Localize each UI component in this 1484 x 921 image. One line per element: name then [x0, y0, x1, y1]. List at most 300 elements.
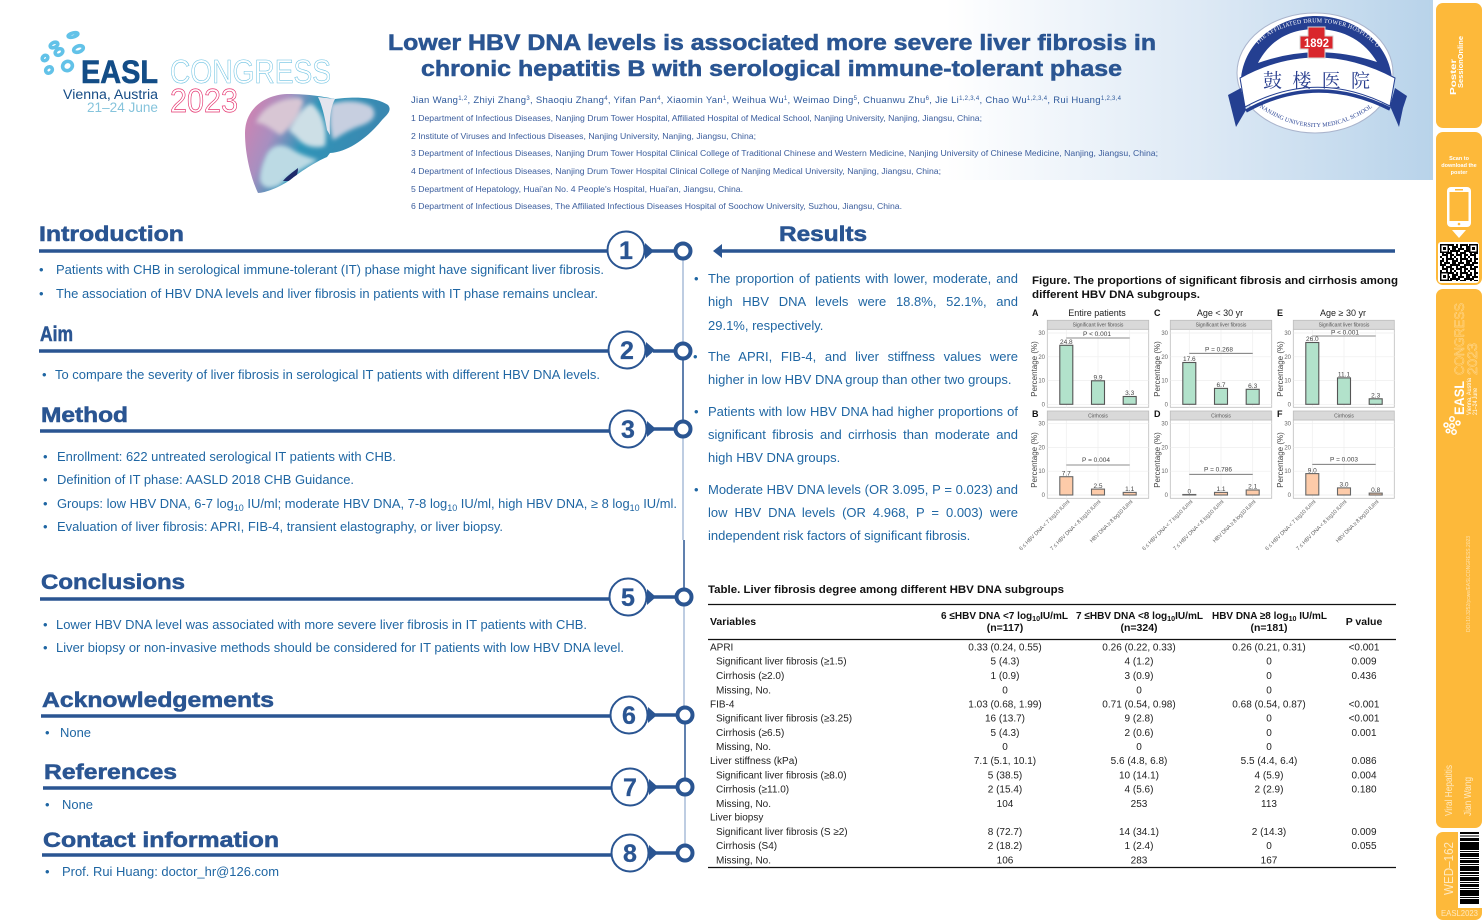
chart F: Age 30 or over, cirrhosis: 0.8: [1371, 487, 1381, 494]
table: liver fibrosis degree: 10 (14.1): [1119, 770, 1159, 782]
sidebar panel: congress details: DOI:10.3252/pcwe/EASLCONGRESS.2023: [1466, 536, 1472, 632]
sidebar panel: congress details: [1436, 289, 1482, 828]
chart C: Age under 30, significant liver fibrosis: 20: [1161, 355, 1169, 361]
chart B: Entire patients, cirrhosis: B: [1032, 409, 1039, 419]
table: liver fibrosis degree: Liver stiffness (kPa): [710, 756, 798, 767]
hospital seal logo: 鼓楼医院: [1263, 66, 1370, 93]
authors: , Shaoqiu Zhang: [530, 95, 604, 106]
chart E: Age 30 or over, significant liver fibrosis: 2.3: [1371, 392, 1381, 400]
chart D: Age under 30, cirrhosis: 0: [1165, 493, 1169, 499]
table header row: (n=117): [987, 622, 1023, 634]
chart F: Age 30 or over, cirrhosis: 10: [1284, 469, 1292, 475]
table: liver fibrosis degree: 5 (4.3): [991, 657, 1019, 668]
results text block: 29.1%, respectively.: [708, 318, 823, 333]
EASL Congress logo: 2023: [170, 82, 238, 119]
authors: 1,2,3,4: [959, 96, 980, 102]
table: liver fibrosis degree: 0.26 (0.21, 0.31): [1232, 642, 1306, 654]
section: Method: IU/ml, high HBV DNA, ≥ 8 log: [457, 496, 630, 511]
section: Method: 3: [621, 416, 635, 444]
hospital seal logo: [1228, 12, 1407, 134]
liver illustration: [245, 94, 390, 193]
table: liver fibrosis degree: 2 (2.9): [1255, 785, 1283, 796]
table: liver fibrosis degree: 5.5 (4.4, 6.4): [1241, 756, 1297, 767]
sidebar panel: congress details: Jian Wang: [1463, 777, 1474, 816]
heading: Aim: Aim: [40, 323, 73, 346]
EASL Congress logo: Vienna, Austria: [63, 87, 159, 102]
chart A: Entire patients, significant liver fibrosis: 3.3: [1125, 390, 1135, 397]
table: liver fibrosis degree: 4 (5.6): [1125, 785, 1153, 796]
chart F: Age 30 or over, cirrhosis: 7 ≤ HBV DNA < 8 log10 IU/ml: [1295, 499, 1348, 552]
heading: References: References: [44, 761, 177, 784]
chart B: Entire patients, cirrhosis: 30: [1038, 422, 1046, 428]
table header row: IU/mL: [1040, 610, 1069, 622]
table: liver fibrosis degree: Significant liver fibrosis (≥8.0): [716, 770, 847, 782]
section: Aim: •: [42, 367, 47, 382]
chart A: Entire patients, significant liver fibrosis: 0: [1042, 402, 1046, 408]
icon: phone: [1447, 187, 1471, 238]
results text block: The APRI, FIB-4, and liver stiffness values were: [708, 349, 1018, 364]
chart C: Age under 30, significant liver fibrosis: 6.7: [1216, 382, 1226, 389]
results text block: The proportion of patients with lower, moderate, and: [708, 271, 1018, 286]
table: liver fibrosis degree: Missing, No.: [716, 856, 771, 866]
chart E: Age 30 or over, significant liver fibrosis: Significant liver fibrosis: [1319, 323, 1370, 329]
section: References: 7: [623, 774, 637, 802]
chart F: Age 30 or over, cirrhosis: 30: [1284, 422, 1292, 428]
section: Method: Enrollment: 622 untreated serological IT patients with CHB.: [57, 449, 396, 464]
authors: , Yifan Pan: [608, 95, 657, 106]
section: Method: •: [43, 496, 48, 511]
icon: white hexagons: [1444, 417, 1460, 434]
chart F: Age 30 or over, cirrhosis: 3.0: [1339, 482, 1349, 489]
heading: Results: [713, 223, 1395, 258]
chart F: Age 30 or over, cirrhosis: F: [1277, 409, 1283, 419]
section: Contact information: Prof. Rui Huang: doctor_hr@126.com: [62, 864, 279, 879]
table: liver fibrosis degree: 0: [1266, 742, 1272, 753]
heading: Acknowledgements: Acknowledgements: [42, 689, 274, 712]
section: Introduction: Patients with CHB in serological immune-tolerant (IT) phase might have significant liver fibrosis.: [56, 262, 604, 277]
table: liver fibrosis degree: Missing, No.: [716, 686, 771, 696]
section: Method: [40, 404, 690, 534]
chart E: Age 30 or over, significant liver fibrosis: 26.0: [1306, 336, 1319, 343]
sidebar panel: congress details: Viral Hepatitis: [1444, 765, 1455, 816]
section: Method: IU/ml.: [640, 496, 677, 511]
chart E: Age 30 or over, significant liver fibrosis: 10: [1284, 378, 1292, 384]
table header row: (n=324): [1120, 622, 1158, 634]
chart D: Age under 30, cirrhosis: 6 ≤ HBV DNA < 7 log10 IU/ml: [1141, 499, 1194, 552]
section: References: None: [62, 797, 93, 812]
authors: , Rui Huang: [1047, 95, 1101, 106]
section: Conclusions: Lower HBV DNA level was associated with more severe liver fibrosis in IT patients with CHB.: [56, 617, 587, 632]
table: liver fibrosis degree: 0.001: [1351, 728, 1377, 739]
table: liver fibrosis degree: 0.26 (0.22, 0.33): [1102, 642, 1176, 654]
section: Method: Evaluation of liver fibrosis: APRI, FIB-4, transient elastography, or liver biopsy.: [57, 519, 503, 534]
table header row: Variables: [710, 616, 756, 628]
hospital seal logo: NANJING UNIVERSITY MEDICAL SCHOOL: [1260, 104, 1372, 127]
table: liver fibrosis degree: FIB-4: [710, 700, 735, 710]
chart C: Age under 30, significant liver fibrosis: 6.3: [1248, 383, 1258, 390]
affiliations: 2 Institute of Viruses and Infectious Diseases, Nanjing University, Nanjing, Jiangsu, China;: [411, 131, 756, 141]
section: Conclusions: [40, 571, 692, 655]
authors: 4: [657, 96, 661, 102]
timeline spine: [683, 258, 685, 853]
authors: 4: [604, 96, 608, 102]
chart D: Age under 30, cirrhosis: [1141, 409, 1272, 552]
section: Contact information: 8: [623, 840, 637, 868]
table: liver fibrosis degree: APRI: [710, 642, 733, 654]
sidebar panel: congress details: Vienna, Austria: [1467, 377, 1473, 415]
chart F: Age 30 or over, cirrhosis: 9.0: [1308, 467, 1317, 474]
table: liver fibrosis degree: 0.009: [1351, 657, 1377, 668]
table: liver fibrosis degree: 167: [1261, 856, 1278, 866]
chart D: Age under 30, cirrhosis: HBV DNA ≥ 8 log10 IU/ml: [1212, 499, 1257, 544]
chart F: Age 30 or over, cirrhosis: 0: [1288, 493, 1292, 499]
chart F: Age 30 or over, cirrhosis: Cirrhosis: [1334, 413, 1354, 419]
authors: 1,2,3,4: [1027, 96, 1048, 102]
EASL Congress logo: [41, 32, 331, 119]
barcode: [1460, 832, 1479, 904]
table: liver fibrosis degree: 104: [997, 799, 1014, 810]
authors: 1: [723, 96, 727, 102]
affiliations: [411, 113, 1158, 211]
sidebar panel: congress details: EASL: [1451, 381, 1467, 415]
QR code: [1438, 242, 1479, 283]
chart D: Age under 30, cirrhosis: 7 ≤ HBV DNA < 8 log10 IU/ml: [1172, 499, 1225, 552]
authors: 6: [926, 96, 930, 102]
table: liver fibrosis degree: 0.086: [1351, 756, 1377, 767]
chart E: Age 30 or over, significant liver fibrosis: E: [1277, 308, 1283, 318]
table: liver fibrosis degree: 8 (72.7): [988, 827, 1022, 838]
chart C: Age under 30, significant liver fibrosis: [1153, 308, 1272, 408]
table: liver fibrosis degree: 4 (1.2): [1125, 657, 1153, 668]
chart C: Age under 30, significant liver fibrosis: Percentage (%): [1153, 341, 1162, 397]
chart A: Entire patients, significant liver fibrosis: 30: [1038, 331, 1046, 337]
table: liver fibrosis degree: 4 (5.9): [1255, 770, 1283, 782]
table: liver fibrosis degree: 2 (0.6): [1125, 728, 1153, 739]
table: liver fibrosis degree: Significant liver fibrosis (≥1.5): [716, 657, 847, 668]
chart A: Entire patients, significant liver fibrosis: A: [1032, 308, 1039, 318]
chart A: Entire patients, significant liver fibrosis: 10: [1038, 378, 1046, 384]
table: liver fibrosis degree: 2 (18.2): [988, 841, 1022, 852]
table: liver fibrosis degree: Cirrhosis (≥11.0): [716, 785, 789, 796]
table header row: 10: [1032, 614, 1040, 623]
chart A: Entire patients, significant liver fibrosis: Significant liver fibrosis: [1073, 323, 1124, 329]
results text block: high HBV DNA groups.: [708, 450, 840, 465]
table: liver fibrosis degree: Significant liver fibrosis (S ≥2): [716, 827, 848, 838]
table: liver fibrosis degree: 0: [1266, 657, 1272, 668]
chart C: Age under 30, significant liver fibrosis: Significant liver fibrosis: [1196, 323, 1247, 329]
section: References: [43, 761, 692, 812]
sidebar panel: scan to download: poster: [1451, 170, 1468, 176]
authors: 5: [854, 96, 858, 102]
figure title: [1032, 275, 1398, 301]
section: Introduction: •: [39, 286, 44, 301]
heading: Conclusions: Conclusions: [41, 571, 185, 594]
table: liver fibrosis degree: 0.68 (0.54, 0.87): [1232, 700, 1306, 710]
table: liver fibrosis degree: 0: [1136, 742, 1142, 753]
table: liver fibrosis degree: 0.180: [1351, 785, 1377, 796]
table: liver fibrosis degree: 0: [1266, 714, 1272, 725]
table: liver fibrosis degree: 9 (2.8): [1125, 714, 1153, 725]
sidebar panel: poster ID and barcode: WED–162: [1441, 842, 1456, 895]
table: liver fibrosis degree: 0.009: [1351, 827, 1377, 838]
hospital seal logo: 1892: [1304, 36, 1329, 50]
table: liver fibrosis degree: 1 (2.4): [1125, 841, 1153, 852]
section: Contact information: [42, 829, 692, 879]
authors: 1,2,3,4: [1101, 96, 1122, 102]
chart E: Age 30 or over, significant liver fibrosis: [1276, 308, 1394, 408]
table: liver fibrosis degree: 106: [997, 856, 1014, 866]
chart E: Age 30 or over, significant liver fibrosis: 11.1: [1338, 372, 1350, 379]
table: liver fibrosis degree: 0.055: [1351, 841, 1377, 852]
section: Method: Definition of IT phase: AASLD 2018 CHB Guidance.: [57, 472, 354, 487]
section: Acknowledgements: None: [60, 725, 91, 740]
table: liver fibrosis degree: 113: [1261, 799, 1277, 810]
chart A: Entire patients, significant liver fibrosis: Entire patients: [1068, 308, 1126, 318]
sidebar panel: poster ID and barcode: EASL2023: [1441, 909, 1479, 918]
section: Method: •: [43, 472, 48, 487]
chart C: Age under 30, significant liver fibrosis: 30: [1161, 331, 1169, 337]
authors: , Xiaomin Yan: [661, 95, 723, 106]
section: Aim: 2: [620, 337, 634, 365]
table: liver fibrosis degree: 0: [1002, 742, 1008, 753]
table header row: IU/mL: [1297, 610, 1328, 622]
results text block: independent risk factors of significant fibrosis.: [708, 528, 970, 543]
table header row: HBV DNA ≥8 log: [1212, 610, 1293, 622]
section: Introduction: •: [39, 262, 44, 277]
authors: 3: [526, 96, 530, 102]
table header row: 10: [1167, 614, 1175, 623]
chart E: Age 30 or over, significant liver fibrosis: 0: [1288, 402, 1292, 408]
results text block: higher in low HBV DNA group than other two groups.: [708, 372, 1012, 387]
sidebar panel: scan to download: Scan to: [1449, 156, 1470, 162]
table: liver fibrosis degree: 0.71 (0.54, 0.98): [1102, 700, 1176, 710]
heading: Introduction: Introduction: [39, 223, 184, 246]
chart E: Age 30 or over, significant liver fibrosis: 20: [1284, 355, 1292, 361]
chart D: Age under 30, cirrhosis: Percentage (%): [1153, 432, 1162, 488]
affiliations: 3 Department of Infectious Diseases, Nanjing Drum Tower Hospital Clinical College of Traditional Chinese and Western Medicine, Nanjing University of Chinese Medicine, Nanjing, Jiangsu, China;: [411, 148, 1158, 158]
results text block: •: [693, 349, 698, 364]
table: liver fibrosis degree: 0: [1266, 686, 1272, 696]
section: Method: IU/ml; moderate HBV DNA, 7-8 log: [244, 496, 447, 511]
table header row: (n=181): [1250, 622, 1288, 634]
results text block: low HBV DNA levels (OR 4.968, P = 0.003) were: [708, 505, 1018, 520]
table: liver fibrosis degree: Cirrhosis (S4): [716, 841, 777, 852]
chart B: Entire patients, cirrhosis: Cirrhosis: [1088, 413, 1108, 419]
table: liver fibrosis degree: 253: [1131, 799, 1148, 810]
chart F: Age 30 or over, cirrhosis: [1264, 409, 1394, 552]
section: References: •: [45, 797, 50, 812]
chart A: Entire patients, significant liver fibrosis: [1030, 308, 1149, 408]
table: liver fibrosis degree: 283: [1131, 856, 1148, 866]
section: Method: Groups: low HBV DNA, 6-7 log: [57, 496, 235, 511]
table: liver fibrosis degree: Cirrhosis (≥6.5): [716, 728, 784, 739]
section: Introduction: [39, 223, 690, 301]
chart A: Entire patients, significant liver fibrosis: 24.8: [1060, 339, 1073, 346]
results text block: significant fibrosis and cirrhosis than moderate and: [708, 427, 1018, 442]
chart C: Age under 30, significant liver fibrosis: P = 0.268: [1205, 346, 1233, 354]
affiliations: 4 Department of Infectious Diseases, Nanjing Drum Tower Hospital Clinical College of Nanjing Medical University, Nanjing, Jiangsu, China;: [411, 166, 941, 176]
table: liver fibrosis degree: 0: [1266, 671, 1272, 682]
table: liver fibrosis degree: 1.03 (0.68, 1.99): [968, 700, 1042, 710]
table header row: [710, 610, 1382, 634]
figure title: Figure. The proportions of significant fibrosis and cirrhosis among: [1032, 275, 1398, 287]
chart E: Age 30 or over, significant liver fibrosis: Percentage (%): [1276, 341, 1285, 397]
authors: 1: [784, 96, 788, 102]
chart B: Entire patients, cirrhosis: 0: [1042, 493, 1046, 499]
chart E: Age 30 or over, significant liver fibrosis: 30: [1284, 331, 1292, 337]
affiliations: 6 Department of Infectious Diseases, The Affiliated Infectious Diseases Hospital of Soochow University, Suzhou, Jiangsu, China.: [411, 201, 902, 211]
chart C: Age under 30, significant liver fibrosis: 10: [1161, 378, 1169, 384]
sidebar panel: poster session online: [1436, 3, 1482, 128]
results text block: Patients with low HBV DNA had higher proportions of: [708, 404, 1018, 419]
chart F: Age 30 or over, cirrhosis: 6 ≤ HBV DNA < 7 log10 IU/ml: [1264, 499, 1317, 552]
table: liver fibrosis degree: 1 (0.9): [991, 671, 1019, 682]
section: Acknowledgements: •: [45, 725, 50, 740]
sidebar panel: poster session online: SessionOnline: [1458, 36, 1465, 88]
chart D: Age under 30, cirrhosis: 20: [1161, 446, 1169, 452]
chart D: Age under 30, cirrhosis: 30: [1161, 422, 1169, 428]
table: liver fibrosis degree: 14 (34.1): [1119, 827, 1159, 838]
authors: , Weihua Wu: [727, 95, 784, 106]
chart F: Age 30 or over, cirrhosis: Percentage (%): [1276, 432, 1285, 488]
authors: , Weimao Ding: [788, 95, 853, 106]
chart E: Age 30 or over, significant liver fibrosis: P < 0.001: [1331, 330, 1359, 336]
chart E: Age 30 or over, significant liver fibrosis: Age ≥ 30 yr: [1320, 308, 1366, 318]
table: liver fibrosis degree: 5 (4.3): [991, 728, 1019, 739]
chart B: Entire patients, cirrhosis: [1018, 409, 1149, 552]
table header row: 10: [1289, 614, 1297, 623]
heading: Contact information: Contact information: [43, 829, 279, 852]
sidebar panel: congress details: CONGRESS: [1451, 303, 1467, 375]
table: liver fibrosis degree: 16 (13.7): [985, 714, 1025, 725]
chart A: Entire patients, significant liver fibrosis: 9.9: [1093, 374, 1103, 382]
results text block: •: [694, 404, 699, 419]
chart F: Age 30 or over, cirrhosis: HBV DNA ≥ 8 log10 IU/ml: [1335, 499, 1380, 544]
section: Conclusions: 5: [621, 584, 635, 612]
chart D: Age under 30, cirrhosis: 1.1: [1216, 486, 1226, 493]
EASL Congress logo: CONGRESS: [170, 53, 331, 90]
section: Introduction: 1: [619, 237, 633, 265]
table header row: 7 ≤HBV DNA <8 log: [1076, 610, 1172, 622]
table title: Table. Liver fibrosis degree among different HBV DNA subgroups: [708, 584, 1064, 596]
table: liver fibrosis degree: 0: [1002, 686, 1008, 696]
chart B: Entire patients, cirrhosis: Percentage (%): [1030, 432, 1039, 488]
table header row: IU/mL: [1175, 610, 1204, 622]
section: Method: •: [43, 449, 48, 464]
table: liver fibrosis degree: Liver biopsy: [710, 812, 763, 824]
table header row: P value: [1346, 616, 1382, 628]
table: liver fibrosis degree: 0: [1266, 728, 1272, 739]
chart B: Entire patients, cirrhosis: 10: [1038, 469, 1046, 475]
chart B: Entire patients, cirrhosis: HBV DNA ≥ 8 log10 IU/ml: [1089, 499, 1134, 544]
chart B: Entire patients, cirrhosis: P = 0.004: [1082, 457, 1110, 464]
section: Aim: To compare the severity of liver fibrosis in serological IT patients with different HBV DNA levels.: [55, 367, 600, 382]
section: Method: 10: [447, 503, 457, 513]
section: Aim: [39, 323, 690, 382]
results text block: high HBV DNA levels were 18.8%, 52.1%, and: [708, 294, 1018, 309]
table: liver fibrosis degree: Cirrhosis (≥2.0): [716, 671, 784, 682]
chart B: Entire patients, cirrhosis: 7 ≤ HBV DNA < 8 log10 IU/ml: [1049, 499, 1102, 552]
section: Acknowledgements: 6: [622, 702, 636, 730]
authors: , Chuanwu Zhu: [857, 95, 925, 106]
affiliations: 5 Department of Hepatology, Huai'an No. 4 People's Hospital, Huai'an, Jiangsu, China.: [411, 184, 743, 194]
chart D: Age under 30, cirrhosis: 2.1: [1248, 484, 1258, 491]
table: liver fibrosis degree: Missing, No.: [716, 742, 771, 753]
table: liver fibrosis degree: 0.33 (0.24, 0.55): [968, 642, 1042, 654]
authors: , Jie Li: [929, 95, 959, 106]
chart A: Entire patients, significant liver fibrosis: P < 0.001: [1083, 331, 1111, 338]
title: Lower HBV DNA levels is associated more severe liver fibrosis in: [388, 30, 1156, 55]
table: liver fibrosis degree: 0: [1266, 841, 1272, 852]
title: [388, 30, 1156, 81]
authors: , Zhiyi Zhang: [467, 95, 526, 106]
chart B: Entire patients, cirrhosis: 7.7: [1062, 470, 1071, 477]
table: liver fibrosis degree: 7.1 (5.1, 10.1): [974, 756, 1036, 767]
heading: Results: Results: [779, 223, 867, 246]
table: liver fibrosis degree: 5.6 (4.8, 6.8): [1111, 756, 1167, 767]
section: Conclusions: •: [43, 640, 48, 655]
sidebar panel: congress details: 21–24 June: [1473, 387, 1479, 415]
chart C: Age under 30, significant liver fibrosis: C: [1154, 308, 1161, 318]
authors: 1,2: [458, 96, 468, 102]
results text block: •: [694, 271, 699, 286]
table: liver fibrosis degree: 2 (14.3): [1252, 827, 1286, 838]
authors: Jian Wang: [411, 95, 458, 106]
chart F: Age 30 or over, cirrhosis: P = 0.003: [1330, 456, 1358, 464]
results text block: •: [694, 482, 699, 497]
section: Method: •: [43, 519, 48, 534]
chart D: Age under 30, cirrhosis: 0: [1187, 488, 1191, 496]
table: liver fibrosis degree: <0.001: [1349, 700, 1380, 710]
chart D: Age under 30, cirrhosis: D: [1154, 409, 1161, 419]
table: liver fibrosis degree: 0.436: [1351, 671, 1377, 682]
table: liver fibrosis degree: <0.001: [1349, 714, 1380, 725]
table: liver fibrosis degree: 0.004: [1351, 770, 1377, 782]
sidebar panel: poster ID and barcode: [1436, 832, 1482, 920]
chart B: Entire patients, cirrhosis: 1.1: [1125, 486, 1135, 493]
EASL Congress logo: 21–24 June: [87, 100, 158, 115]
title: chronic hepatitis B with serological immune-tolerant phase: [421, 56, 1122, 81]
chart D: Age under 30, cirrhosis: Cirrhosis: [1211, 413, 1231, 419]
chart A: Entire patients, significant liver fibrosis: 20: [1038, 355, 1046, 361]
section: Conclusions: Liver biopsy or non-invasive methods should be considered for IT patients with low HBV DNA level.: [56, 640, 624, 655]
table: liver fibrosis degree: 3 (0.9): [1125, 671, 1153, 682]
table header row: 6 ≤HBV DNA <7 log: [941, 610, 1037, 622]
table: liver fibrosis degree: <0.001: [1349, 642, 1380, 654]
chart B: Entire patients, cirrhosis: 6 ≤ HBV DNA < 7 log10 IU/ml: [1018, 499, 1071, 552]
chart C: Age under 30, significant liver fibrosis: Age < 30 yr: [1197, 308, 1243, 318]
chart B: Entire patients, cirrhosis: 2.5: [1093, 483, 1103, 490]
section: Method: 10: [234, 503, 244, 513]
affiliations: 1 Department of Infectious Diseases, Nanjing Drum Tower Hospital, Affiliated Hospital of Medical School, Nanjing University, Nanjing, Jiangsu, China;: [411, 113, 982, 123]
authors: , Chao Wu: [980, 95, 1027, 106]
section: Contact information: •: [45, 864, 50, 879]
header gradient band: [0, 0, 1433, 180]
results text block: Moderate HBV DNA levels (OR 3.095, P = 0.023) and: [708, 482, 1018, 497]
figure title: different HBV DNA subgroups.: [1032, 289, 1200, 301]
table: liver fibrosis degree: 5 (38.5): [988, 770, 1022, 782]
sidebar panel: poster session online: Poster: [1449, 59, 1458, 95]
chart B: Entire patients, cirrhosis: 20: [1038, 446, 1046, 452]
table: liver fibrosis degree: [708, 604, 1396, 868]
chart D: Age under 30, cirrhosis: 10: [1161, 469, 1169, 475]
table: liver fibrosis degree: Significant liver fibrosis (≥3.25): [716, 714, 852, 725]
table: liver fibrosis degree: Missing, No.: [716, 799, 771, 810]
section: Introduction: The association of HBV DNA levels and liver fibrosis in patients with IT phase remains unclear.: [56, 286, 598, 301]
section: Method: 10: [630, 503, 640, 513]
sidebar panel: scan to download: [1436, 132, 1482, 285]
chart C: Age under 30, significant liver fibrosis: 0: [1165, 402, 1169, 408]
